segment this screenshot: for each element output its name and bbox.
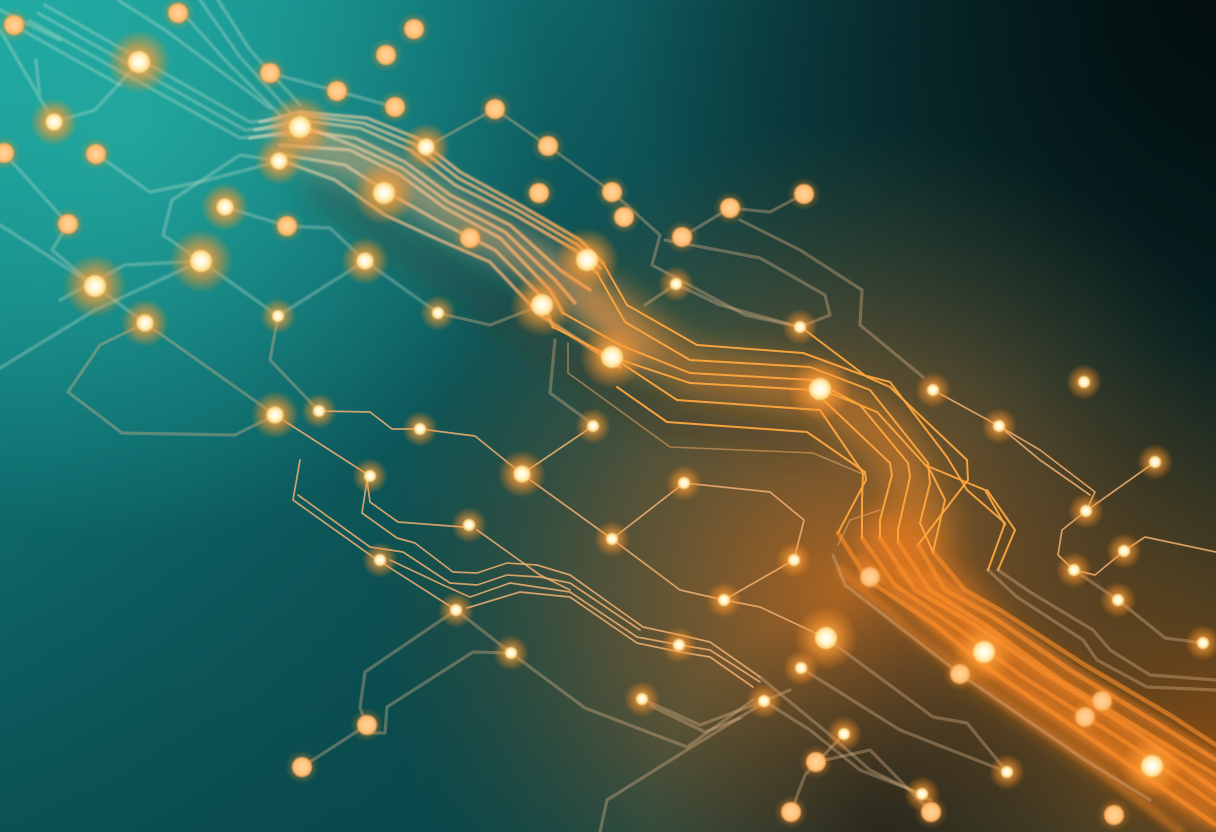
lower traces (302, 610, 1007, 832)
middle traces (275, 390, 1216, 687)
pale upper-left traces (0, 0, 438, 368)
soft shadow and glow around main bundle (290, 135, 1216, 800)
mid-section trace band (250, 112, 620, 367)
upper right dim traces (426, 109, 923, 420)
dim branch traces beneath bundle (568, 343, 880, 545)
main orange bundle (553, 263, 1015, 570)
nodes: small glowing points (260, 266, 1216, 812)
lower right thick streams (826, 533, 1216, 832)
upper-centre and left thin traces (68, 305, 1203, 643)
